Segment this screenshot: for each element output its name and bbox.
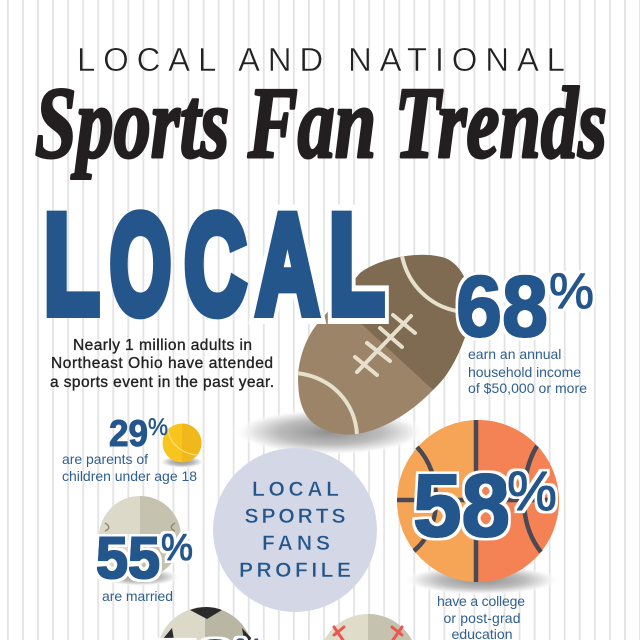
panel: local sports fans profile: FANS bbox=[262, 532, 330, 555]
stat: 68 percent bbox=[456, 259, 594, 396]
panel: local sports fans profile: SPORTS bbox=[244, 505, 346, 528]
shadow: grey ball bbox=[100, 568, 180, 586]
stat: 58 percent: or post-grad bbox=[444, 610, 520, 626]
panel: local sports fans profile: LOCAL bbox=[252, 478, 339, 501]
heading: LOCAL: L bbox=[329, 186, 384, 342]
stat: 55 percent: 55 bbox=[96, 526, 160, 591]
stat: 29 percent bbox=[62, 413, 197, 484]
subtitle: local and national: LOCAL AND NATIONAL bbox=[77, 41, 565, 78]
stat: 68 percent: % bbox=[549, 263, 594, 319]
stat: 29 percent: children under age 18 bbox=[62, 468, 197, 484]
heading: LOCAL: L bbox=[44, 186, 99, 342]
heading: LOCAL bbox=[44, 186, 384, 342]
text: intro statement: a sports event in the past year. bbox=[50, 374, 274, 391]
stat: 68 percent: household income bbox=[468, 364, 581, 380]
stat: 55 percent bbox=[96, 526, 193, 604]
stat: 68 percent: of $50,000 or more bbox=[468, 380, 587, 396]
stat: 68 percent: 68 bbox=[456, 259, 548, 355]
shadow: football bbox=[234, 409, 426, 455]
stat: 55 percent: % bbox=[161, 527, 193, 568]
icon: soccer ball bbox=[157, 607, 253, 640]
heading: LOCAL: L bbox=[329, 186, 384, 342]
heading: LOCAL: A bbox=[256, 186, 319, 342]
stat: 58 percent: 58 bbox=[413, 455, 510, 555]
heading: LOCAL: C bbox=[184, 186, 246, 342]
shadow: basketball bbox=[404, 565, 560, 595]
text: intro statement: Nearly 1 million adults in bbox=[73, 337, 252, 354]
icon: football bbox=[298, 254, 465, 434]
text: intro statement: Northeast Ohio have attended bbox=[51, 355, 273, 372]
panel: local sports fans profile bbox=[213, 448, 377, 612]
stat: 29 percent: 29 bbox=[109, 413, 148, 454]
stat: 29 percent: are parents of bbox=[62, 451, 148, 467]
text: intro statement bbox=[50, 337, 274, 391]
heading: LOCAL: O bbox=[110, 186, 171, 342]
heading: LOCAL: A bbox=[256, 186, 319, 342]
panel: local sports fans profile: PROFILE bbox=[239, 559, 351, 582]
icon: tennis ball bbox=[160, 424, 204, 468]
icon: baseball bbox=[318, 614, 418, 640]
icon: basketball bbox=[397, 420, 559, 582]
stat: 68 percent: earn an annual bbox=[468, 346, 561, 362]
stat: 58 percent bbox=[413, 455, 557, 640]
stat: 29 percent: % bbox=[148, 414, 168, 441]
stat: 58 percent: % bbox=[507, 459, 557, 522]
stat: 55 percent: are married bbox=[102, 588, 173, 604]
icon: grey ball bbox=[99, 496, 181, 578]
stat: 58 percent: have a college bbox=[437, 593, 525, 609]
